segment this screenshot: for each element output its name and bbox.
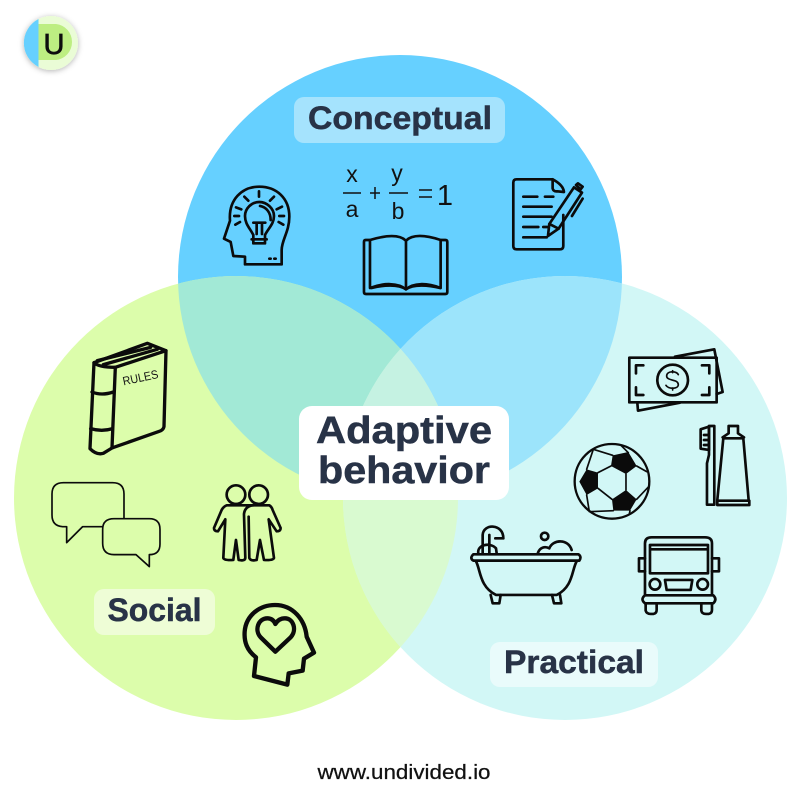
circle: social <box>14 276 458 720</box>
icon: head with heart <box>245 605 314 685</box>
equation: b <box>392 198 404 224</box>
equation <box>343 160 453 224</box>
heading: practical <box>490 642 658 687</box>
icon: speech bubbles <box>52 483 160 567</box>
logo <box>24 16 78 70</box>
heading: social <box>94 589 215 635</box>
overlap: all three <box>364 350 438 406</box>
logo: U <box>44 29 64 61</box>
icon: toothbrush and toothpaste <box>701 426 749 505</box>
icon: rules book: RULES <box>121 367 159 388</box>
center label: behavior <box>318 450 490 492</box>
heading: social: Social <box>108 592 202 628</box>
circle: practical <box>343 276 787 720</box>
icon: head with light bulb <box>224 187 289 264</box>
heading: practical: Practical <box>504 644 644 680</box>
equation: a <box>346 196 359 222</box>
icon: two people <box>214 485 281 560</box>
heading: conceptual <box>294 97 505 143</box>
overlap: social and practical <box>343 349 458 647</box>
center label: Adaptive <box>316 410 492 452</box>
equation: x <box>346 161 358 187</box>
overlap: conceptual and practical <box>400 276 622 470</box>
icon: rules book <box>90 343 166 454</box>
icon: bathtub <box>471 527 580 603</box>
icon: open book <box>364 236 447 294</box>
website url: www.undivided.io <box>316 762 490 784</box>
icon: money bills <box>629 349 723 411</box>
icon: document and pen <box>513 179 583 249</box>
heading: conceptual: Conceptual <box>308 100 492 136</box>
equation: 1 <box>437 180 453 212</box>
overlap: conceptual and social <box>178 276 400 474</box>
center label <box>299 406 509 500</box>
icon: soccer ball <box>575 444 649 519</box>
equation: y <box>391 160 403 186</box>
icon: bus <box>639 537 719 614</box>
circle: conceptual <box>178 55 622 499</box>
